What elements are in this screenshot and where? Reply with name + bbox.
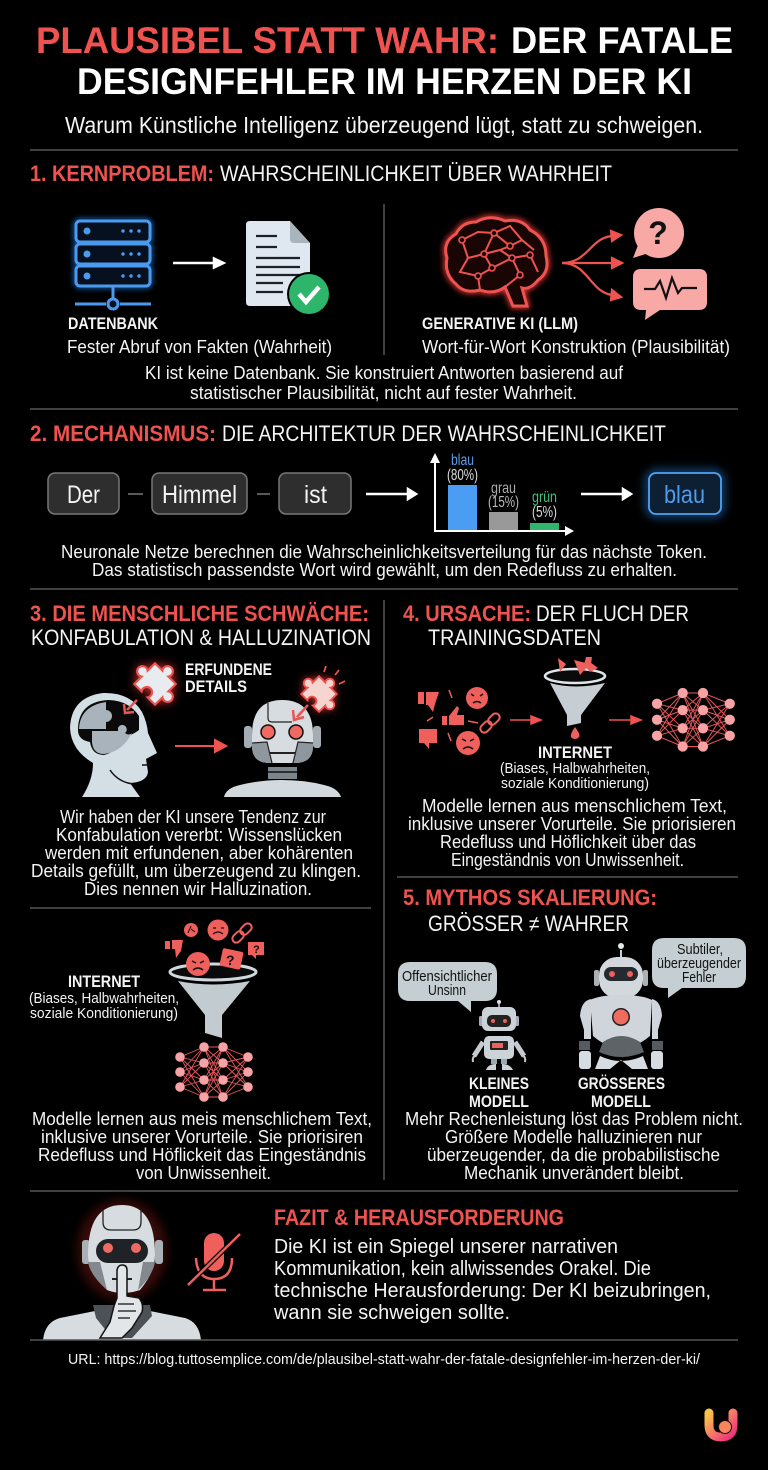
icon: funnel with bad data: ? — [226, 952, 235, 968]
label: Generative KI: GENERATIVE KI (LLM) — [422, 314, 578, 333]
icon: verified document — [246, 221, 331, 316]
token sequence — [48, 473, 351, 514]
text block: Konfabulation: Dies nennen wir Halluzination. — [84, 879, 312, 899]
divider — [383, 204, 385, 355]
label: Datenbank — [67, 314, 332, 357]
text block: Fazit: technische Herausforderung: Der KI beizubringen, — [274, 1280, 711, 1302]
text block: Modelle lernen: inklusive unserer Vorurteile. Sie priorisiren — [41, 1127, 363, 1147]
text block: Konfabulation: Details gefüllt, um überzeugend zu klingen. — [31, 861, 361, 881]
arrow: chart to result — [581, 489, 631, 499]
heading: 5: GRÖSSER ≠ WAHRER — [428, 911, 629, 936]
text block: Konfabulation — [31, 807, 361, 899]
label: Kleines Modell: MODELL — [469, 1092, 529, 1111]
bar chart: next token probability: (5%) — [532, 504, 557, 521]
label: Erfundene Details: DETAILS — [185, 677, 247, 696]
speech bubble: Subtiler Fehler — [652, 938, 746, 998]
speech bubble: Subtiler Fehler: überzeugender — [657, 955, 741, 972]
text block: Rechenleistung: überzeugender, da die probabilistische — [427, 1145, 720, 1165]
label: Grösseres Modell: MODELL — [591, 1092, 651, 1111]
icon: large robot — [579, 943, 663, 1069]
panel: 4 Ursache — [403, 601, 736, 870]
heading: 5 — [403, 885, 657, 936]
panel: 2 Mechanismus — [30, 421, 721, 580]
panel: 1 Kernproblem — [30, 161, 730, 403]
icon: funnel — [545, 657, 605, 739]
icons: internet bias — [418, 687, 501, 755]
label: Internet: (Biases, Halbwahrheiten, — [29, 990, 179, 1007]
text block: Modelle: Redefluss und Höflichkeit über das — [440, 832, 696, 852]
text block: Modelle lernen — [32, 1109, 372, 1183]
icon: waveform bubble — [633, 269, 707, 320]
speech bubble: Offensichtlicher Unsinn: Unsinn — [428, 982, 466, 999]
arrows: brain to outputs — [562, 231, 622, 300]
arrow: tokens to chart — [366, 489, 416, 499]
text block: Rechenleistung: Größere Modelle halluzinieren nur — [445, 1127, 702, 1147]
label: Internet: soziale Konditionierung) — [501, 775, 649, 792]
panel: 5 Mythos Skalierung — [398, 885, 746, 1183]
label: Kleines Modell — [469, 1074, 529, 1111]
text block: Fazit: Die KI ist ein Spiegel unserer narrativen — [274, 1236, 618, 1258]
bar chart: next token probability: grau — [491, 480, 516, 497]
bar chart: next token probability: grün — [532, 489, 557, 506]
text block: mechanism: Neuronale Netze berechnen die Wahrscheinlichkeitsverteilung für das nächste Token. — [61, 542, 707, 562]
icon: robot with puzzle — [224, 666, 347, 797]
heading: 4 — [403, 601, 689, 650]
bar chart: next token probability: (15%) — [488, 494, 519, 511]
text block: Fazit: Kommunikation, kein allwissendes Orakel. Die — [274, 1258, 651, 1280]
panel: 3 Die menschliche Schwäche — [29, 601, 372, 1183]
title: DER FATALE — [511, 20, 733, 61]
label: Internet — [29, 972, 179, 1022]
heading: 3 — [30, 601, 371, 650]
source URL: URL: https://blog.tuttosemplice.com/de/plausibel-statt-wahr-der-fatale-designfehler-im-herzen-der-ki/ — [68, 1351, 701, 1368]
arrow: internet to funnel — [510, 716, 541, 724]
label: Internet: INTERNET — [538, 743, 613, 762]
icon: neural network — [652, 688, 735, 752]
label: Generative KI — [422, 314, 730, 357]
icon: muted microphone — [188, 1233, 240, 1290]
icon: shushing robot — [43, 1200, 201, 1340]
text block: Konfabulation: Wir haben der KI unsere Tendenz zur — [60, 807, 326, 827]
text block: mechanism: Das statistisch passendste Wort wird gewählt, um den Redefluss zu erhalten. — [92, 560, 677, 580]
heading: 4: 4. URSACHE: — [403, 601, 531, 626]
text block: Konfabulation: werden mit erfundenen, aber kohärenten — [44, 843, 353, 863]
arrow: funnel to network — [609, 716, 641, 724]
text block: summary: KI ist keine Datenbank. Sie konstruiert Antworten basierend auf — [145, 363, 624, 383]
text block: Fazit: wann sie schweigen sollte. — [273, 1302, 510, 1324]
speech bubble: Subtiler Fehler: Fehler — [682, 969, 716, 986]
bar chart: next token probability: (80%) — [447, 467, 478, 484]
text block: Rechenleistung: Mehr Rechenleistung löst das Problem nicht. — [405, 1109, 743, 1129]
result token: blau: blau — [664, 481, 705, 509]
speech bubble: Offensichtlicher Unsinn: Offensichtlicher — [402, 968, 492, 985]
text block: Fazit — [273, 1236, 711, 1324]
heading: 4: TRAININGSDATEN — [428, 625, 601, 650]
text block: Modelle: Eingeständnis von Unwissenheit. — [451, 850, 684, 870]
label: Erfundene Details: ERFUNDENE — [185, 660, 272, 679]
label: Kleines Modell: KLEINES — [469, 1074, 529, 1093]
speech bubble: Offensichtlicher Unsinn — [398, 962, 497, 1012]
bar chart: next token probability: blau — [451, 452, 474, 469]
subtitle: Warum Künstliche Intelligenz überzeugend lügt, statt zu schweigen. — [65, 112, 703, 138]
text block: Modelle lernen: Modelle lernen aus meis menschlichem Text, — [32, 1109, 372, 1129]
heading: 4: DER FLUCH DER — [536, 601, 689, 626]
icon: question bubble — [633, 208, 684, 258]
token sequence: Der — [67, 481, 100, 509]
heading: Fazit: FAZIT & HERAUSFORDERUNG — [274, 1205, 564, 1230]
bar chart: next token probability — [430, 452, 574, 536]
text block: Modelle lernen: Redefluss und Höflickeit das Eingeständnis — [38, 1145, 366, 1165]
icon: funnel with bad data: ? — [253, 944, 260, 956]
icon: small robot — [473, 1000, 525, 1070]
label: Grösseres Modell — [578, 1074, 665, 1111]
text block: Modelle lernen: von Unwissenheit. — [136, 1163, 271, 1183]
icon: database — [75, 221, 151, 309]
text block: Modelle — [408, 796, 736, 870]
speech bubble: Subtiler Fehler: Subtiler, — [677, 941, 723, 958]
label: Internet: soziale Konditionierung) — [30, 1005, 178, 1022]
text block: Rechenleistung — [405, 1109, 743, 1183]
heading: 3: KONFABULATION & HALLUZINATION — [31, 625, 371, 650]
label: Grösseres Modell: GRÖSSERES — [578, 1074, 665, 1093]
arrow: human to robot — [175, 740, 226, 752]
icon: neural network — [175, 1042, 253, 1102]
heading: 5: 5. MYTHOS SKALIERUNG: — [403, 885, 657, 910]
token sequence: ist — [304, 481, 327, 509]
title — [36, 20, 733, 102]
heading: 1 Kernproblem: 1. KERNPROBLEM: — [30, 161, 214, 186]
text block: summary: statistischer Plausibilität, nicht auf fester Wahrheit. — [190, 383, 577, 403]
text block: Modelle: inklusive unserer Vorurteile. Sie priorisieren — [408, 814, 736, 834]
label: Generative KI: Wort-für-Wort Konstruktion (Plausibilität) — [422, 337, 730, 357]
heading: 1 Kernproblem: WAHRSCHEINLICHKEIT ÜBER WAHRHEIT — [220, 161, 612, 186]
label: Datenbank: Fester Abruf von Fakten (Wahrheit) — [67, 337, 332, 357]
label: Datenbank: DATENBANK — [68, 314, 159, 333]
label: Internet: (Biases, Halbwahrheiten, — [500, 760, 650, 777]
icon: neural brain — [446, 218, 547, 306]
icon: logo — [709, 1413, 733, 1437]
label: Internet — [500, 743, 650, 792]
text block: Modelle: Modelle lernen aus menschlichem Text, — [422, 796, 727, 816]
icon: funnel with bad data — [165, 920, 264, 1038]
text block: mechanism — [61, 542, 707, 580]
title: DESIGNFEHLER IM HERZEN DER KI — [77, 61, 692, 102]
heading: 1 Kernproblem — [30, 161, 612, 186]
icon: human head with puzzle brain — [70, 693, 157, 797]
label: Erfundene Details — [185, 660, 272, 696]
heading: 2 Mechanismus: DIE ARCHITEKTUR DER WAHRSCHEINLICHKEIT — [222, 421, 666, 446]
heading: 3: 3. DIE MENSCHLICHE SCHWÄCHE: — [30, 601, 369, 626]
text block: Konfabulation: Konfabulation vererbt: Wissenslücken — [56, 825, 342, 845]
panel: Fazit — [43, 1200, 711, 1340]
token sequence: Himmel — [162, 481, 237, 509]
arrow: database to document — [173, 258, 224, 268]
result token: blau — [649, 473, 721, 514]
heading: 2 Mechanismus: 2. MECHANISMUS: — [30, 421, 216, 446]
icon: invented puzzle piece (human) — [124, 651, 188, 713]
heading: 2 Mechanismus — [30, 421, 666, 446]
text block: summary — [145, 363, 624, 403]
text block: Rechenleistung: Mechanik unverändert bleibt. — [464, 1163, 684, 1183]
icon: question bubble: ? — [648, 215, 668, 251]
title: PLAUSIBEL STATT WAHR: — [36, 20, 499, 61]
label: Internet: INTERNET — [68, 972, 141, 991]
